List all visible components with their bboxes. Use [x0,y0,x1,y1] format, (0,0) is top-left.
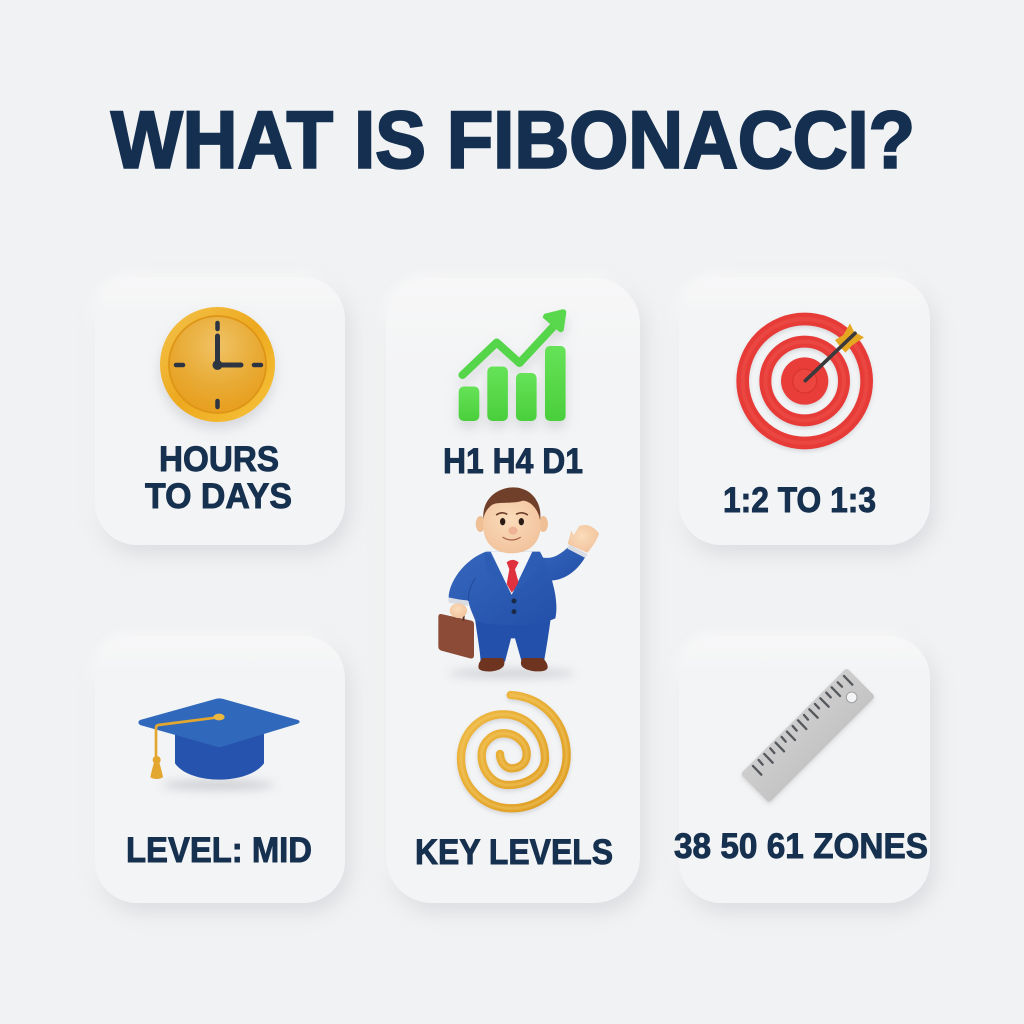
icon: graduation cap [138,698,300,790]
panel: hours to days [95,277,345,545]
briefcase [438,614,474,659]
illustration: businessman waving with briefcase [438,487,599,677]
jacket [449,552,556,625]
icon: ruler [745,672,871,799]
label: hours to days [145,440,292,516]
shirt [491,552,532,595]
hair [483,487,540,520]
label: 1:2 to 1:3: 1:2 TO 1:3 [723,481,876,520]
icon: red target with arrow [743,319,867,443]
shoes [478,658,504,671]
panel: risk reward [679,277,930,545]
title: WHAT IS FIBONACCI? [111,96,915,186]
raised arm [533,546,586,581]
panel: level mid [95,636,345,903]
left cuff and hand [448,597,469,606]
label: key levels: KEY LEVELS [415,833,613,872]
panel: center column [386,278,640,903]
icon: clock [160,307,275,422]
label: hours to days: HOURS [159,440,279,479]
trousers [475,618,551,662]
label: H1 H4 D1: H1 H4 D1 [443,442,583,481]
tie [507,560,519,593]
label: level mid: LEVEL: MID [126,831,312,870]
panel: zones [674,636,930,903]
icon: green growth chart [459,310,566,421]
face [500,518,505,525]
icon: gold spiral [461,695,567,808]
label: hours to days: TO DAYS [145,477,292,516]
lapels [484,553,512,595]
label: 38 50 61 zones: 38 50 61 ZONES [674,827,928,866]
head [476,516,485,532]
